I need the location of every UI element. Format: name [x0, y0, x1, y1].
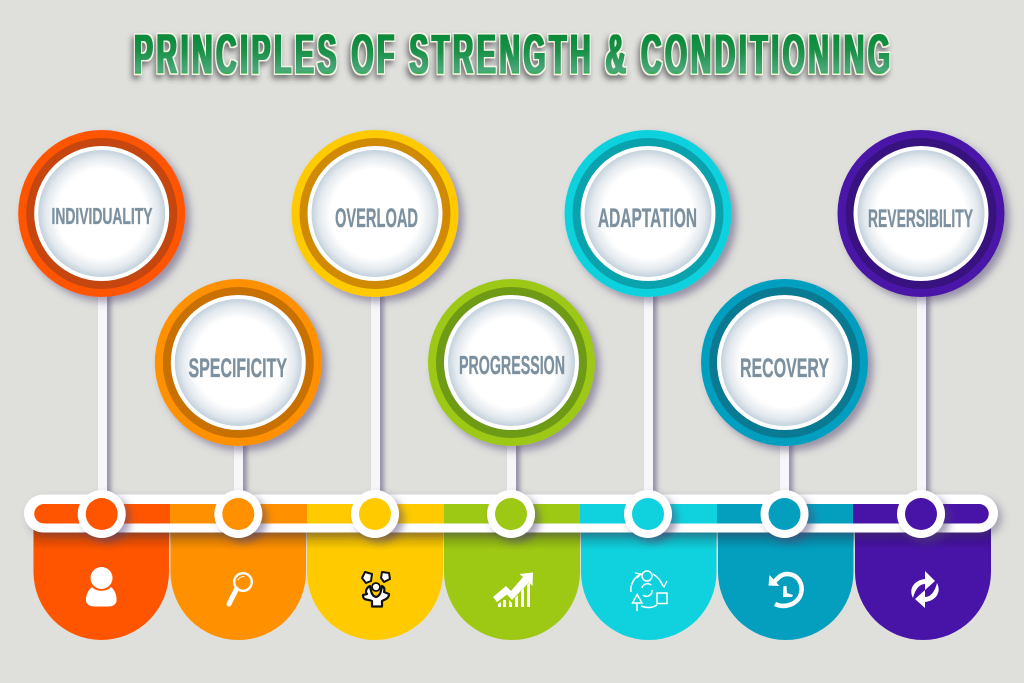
icon: reversibility arrows	[911, 571, 939, 608]
icon: overload figure	[362, 572, 390, 606]
label: progression: PROGRESSION	[459, 350, 565, 380]
icon: person	[86, 567, 117, 606]
label: overload: OVERLOAD	[335, 203, 418, 233]
panel: progression circle	[428, 279, 595, 446]
panel: specificity circle	[155, 279, 322, 446]
icon: recovery clock	[768, 574, 802, 606]
stems	[98, 290, 926, 500]
label: specificity: SPECIFICITY	[188, 353, 287, 383]
timeline nodes	[78, 490, 945, 538]
node 1	[78, 490, 126, 538]
tab: specificity	[170, 525, 306, 640]
label: individuality: INDIVIDUALITY	[52, 203, 152, 229]
icon: adaptation cycle	[631, 571, 667, 611]
tab: recovery	[718, 525, 854, 640]
tab: individuality	[34, 525, 169, 640]
panel: overload circle	[292, 130, 458, 297]
panel: recovery circle	[701, 279, 868, 446]
node 7	[897, 490, 945, 538]
node 6	[760, 490, 808, 538]
node 3	[351, 490, 399, 538]
panel: individuality circle	[18, 130, 185, 297]
tab: adaptation	[581, 525, 716, 640]
node 2	[214, 490, 262, 538]
tab: overload	[307, 525, 443, 640]
timeline bar	[24, 494, 998, 532]
title: PRINCIPLES OF STRENGTH & CONDITIONING	[134, 22, 890, 86]
label: recovery: RECOVERY	[740, 353, 829, 383]
panel: bottom colored tabs	[34, 525, 991, 640]
icon: magnifier	[229, 573, 252, 604]
node 5	[624, 490, 672, 538]
node 4	[487, 490, 535, 538]
tab: reversibility	[855, 525, 991, 640]
tab: progression	[444, 525, 580, 640]
panel: reversibility circle	[838, 130, 1004, 297]
icon: growth chart	[493, 572, 533, 607]
label: adaptation: ADAPTATION	[598, 203, 697, 233]
panel: adaptation circle	[564, 130, 732, 297]
